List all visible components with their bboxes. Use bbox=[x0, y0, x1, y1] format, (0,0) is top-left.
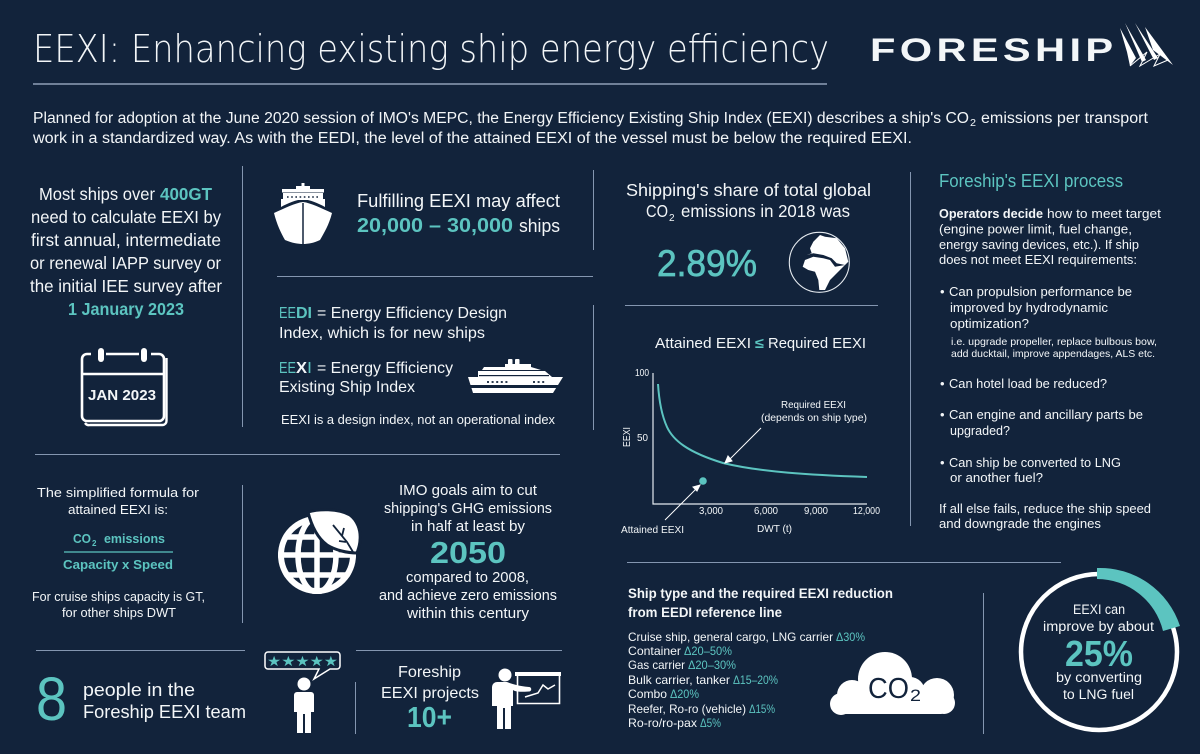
panel: ship type reduction list: Container bbox=[628, 644, 681, 658]
text: shipping's share of emissions: emissions in 2018 was bbox=[681, 201, 850, 221]
text: EEDI and EEXI definitions: EE bbox=[279, 305, 296, 322]
panel: Foreship's EEXI process: i.e. upgrade propeller, replace bulbous bow, bbox=[951, 336, 1157, 348]
text: ships affected: 20,000 – 30,000 bbox=[357, 214, 513, 237]
text: Foreship EEXI projects: 10+ bbox=[407, 702, 452, 734]
panel: who must calculate EEXI: Most ships over bbox=[39, 184, 155, 204]
panel: ship type reduction list: Δ20–30% bbox=[688, 658, 736, 672]
chart: attained vs required EEXI: 3,000 bbox=[699, 505, 723, 517]
panel: Foreship's EEXI process: how to meet target bbox=[1047, 206, 1161, 221]
panel: simplified formula: attained EEXI is: bbox=[68, 502, 168, 517]
text: ships affected bbox=[357, 191, 560, 237]
text: Foreship EEXI projects bbox=[381, 664, 479, 734]
panel: ship type reduction list: Ship type and the required EEXI reduction bbox=[628, 586, 893, 601]
text: ships affected: ships bbox=[519, 216, 560, 236]
icon: calendar: JAN 2023 bbox=[88, 388, 156, 404]
panel: Foreship's EEXI process: Can ship be converted to LNG bbox=[949, 455, 1121, 470]
callout: 25% improvement ring: 25% bbox=[1065, 633, 1133, 674]
panel: simplified formula: Capacity x Speed bbox=[63, 557, 173, 572]
chart: attained vs required EEXI: Required EEXI bbox=[768, 336, 866, 352]
panel: Foreship's EEXI process: Can engine and ancillary parts be bbox=[949, 407, 1143, 422]
panel: Foreship's EEXI process: (engine power limit, fuel change, bbox=[939, 222, 1132, 236]
callout: 25% improvement ring bbox=[1021, 568, 1180, 730]
text: EEDI and EEXI definitions: I bbox=[307, 360, 312, 377]
panel: ship type reduction list: Cruise ship, general cargo, LNG carrier bbox=[628, 630, 833, 644]
icon: presenter with chart bbox=[492, 668, 561, 729]
panel: ship type reduction list: Combo bbox=[628, 687, 667, 701]
panel: who must calculate EEXI: the initial IEE survey after bbox=[30, 276, 222, 296]
chart: attained vs required EEXI: 100 bbox=[635, 367, 649, 379]
panel: Foreship's EEXI process: Operators decide bbox=[939, 206, 1043, 221]
callout: 25% improvement ring: by converting bbox=[1056, 670, 1142, 685]
text: EEDI and EEXI definitions: EEXI is a design index, not an operational index bbox=[281, 412, 555, 427]
text: IMO goals: in half at least by bbox=[411, 518, 525, 535]
icon: CO2 cloud: CO bbox=[868, 673, 909, 705]
text: IMO goals: within this century bbox=[406, 605, 530, 622]
panel: ship type reduction list bbox=[628, 586, 893, 730]
panel: Foreship's EEXI process bbox=[939, 171, 1161, 531]
panel: who must calculate EEXI: 1 January 2023 bbox=[68, 299, 184, 319]
text: IMO goals: 2050 bbox=[430, 535, 506, 570]
text: ships affected: Fulfilling EEXI may affect bbox=[357, 191, 560, 211]
text: EEDI and EEXI definitions: X bbox=[296, 360, 307, 377]
big number: team size: Foreship EEXI team bbox=[83, 702, 246, 722]
chart: attained vs required EEXI: 50 bbox=[637, 432, 648, 444]
panel: ship type reduction list: Δ20–50% bbox=[684, 644, 732, 658]
chart: attained vs required EEXI: 12,000 bbox=[853, 505, 880, 517]
panel: Foreship's EEXI process: Can propulsion performance be bbox=[949, 284, 1132, 299]
callout: 25% improvement ring: to LNG fuel bbox=[1063, 687, 1134, 702]
text: EEDI and EEXI definitions: DI bbox=[296, 305, 312, 322]
icon: earth globe bbox=[789, 232, 849, 292]
panel: ship type reduction list: Δ15–20% bbox=[733, 673, 778, 687]
chart: attained vs required EEXI: Attained EEXI bbox=[655, 336, 751, 352]
chart: attained vs required EEXI: Attained EEXI bbox=[621, 524, 684, 536]
text: EEDI and EEXI definitions: = Energy Efficiency Design bbox=[317, 305, 507, 322]
text: IMO goals: and achieve zero emissions bbox=[379, 587, 557, 604]
heading: process: Foreship's EEXI process bbox=[939, 171, 1123, 191]
panel: ship type reduction list: Δ20% bbox=[670, 687, 699, 701]
panel: simplified formula: For cruise ships capacity is GT, bbox=[32, 590, 205, 604]
panel: who must calculate EEXI: or renewal IAPP survey or bbox=[30, 253, 221, 273]
panel: Foreship's EEXI process: does not meet EEXI requirements: bbox=[939, 252, 1137, 267]
logo: Foreship: FORESHIP bbox=[870, 32, 1113, 68]
intro paragraph: Planned for adoption at the June 2020 session of IMO's MEPC, the Energy Efficiency Existing Ship Index (EEXI) describes a ship's CO bbox=[33, 110, 969, 127]
panel: ship type reduction list: Reefer, Ro-ro (vehicle) bbox=[628, 702, 746, 716]
panel: Foreship's EEXI process: add ducktail, improve appendages, ALS etc. bbox=[951, 348, 1155, 360]
text: shipping's share of emissions: 2.89% bbox=[657, 243, 757, 284]
icon: person with star rating: ★★★★★ bbox=[267, 654, 338, 670]
panel: Foreship's EEXI process: energy saving devices, etc.). If ship bbox=[939, 237, 1139, 252]
intro paragraph: emissions per transport bbox=[981, 110, 1149, 127]
icon: cruise ship bbox=[468, 359, 563, 393]
panel: who must calculate EEXI: need to calculate EEXI by bbox=[31, 207, 221, 227]
logo: Foreship bbox=[870, 23, 1173, 68]
chart: attained vs required EEXI: ≤ bbox=[755, 336, 764, 352]
icon: person with star rating bbox=[265, 652, 340, 733]
text: IMO goals bbox=[379, 482, 557, 622]
text: IMO goals: IMO goals aim to cut bbox=[399, 482, 538, 499]
panel: who must calculate EEXI: 400GT bbox=[160, 184, 212, 204]
icon: globe with leaf bbox=[278, 510, 360, 594]
chart: attained vs required EEXI: 9,000 bbox=[804, 505, 828, 517]
panel: ship type reduction list: from EEDI reference line bbox=[628, 605, 782, 620]
text: IMO goals: compared to 2008, bbox=[406, 569, 529, 586]
text: Foreship EEXI projects: EEXI projects bbox=[381, 685, 479, 702]
panel: Foreship's EEXI process: upgraded? bbox=[950, 423, 1010, 438]
chart: attained vs required EEXI: (depends on ship type) bbox=[761, 412, 867, 424]
intro paragraph: work in a standardized way. As with the EEDI, the level of the attained EEXI of the vessel must be below the required EEXI. bbox=[32, 130, 912, 147]
callout: 25% improvement ring: improve by about bbox=[1043, 619, 1154, 634]
text: EEDI and EEXI definitions: EE bbox=[279, 360, 296, 377]
panel: Foreship's EEXI process: • bbox=[940, 376, 945, 391]
big number: team size: 8 bbox=[36, 665, 67, 733]
panel: Foreship's EEXI process: optimization? bbox=[950, 316, 1029, 331]
chart: attained vs required EEXI: EEXI bbox=[621, 427, 633, 447]
panel: who must calculate EEXI bbox=[30, 184, 222, 319]
text: shipping's share of emissions: 2 bbox=[669, 213, 675, 224]
big number: team size: people in the bbox=[83, 680, 195, 700]
text: shipping's share of emissions: Shipping's share of total global bbox=[626, 180, 871, 200]
text: shipping's share of emissions: CO bbox=[646, 201, 668, 221]
big number: team size bbox=[36, 665, 246, 733]
panel: ship type reduction list: Δ5% bbox=[700, 716, 721, 730]
callout: 25% improvement ring: EEXI can bbox=[1073, 602, 1125, 617]
panel: ship type reduction list: Gas carrier bbox=[628, 658, 685, 672]
title: EEXI: Enhancing existing ship energy efficiency bbox=[33, 27, 829, 71]
chart: attained vs required EEXI: 6,000 bbox=[754, 505, 778, 517]
panel: Foreship's EEXI process: Can hotel load be reduced? bbox=[949, 376, 1107, 391]
panel: simplified formula: emissions bbox=[104, 531, 165, 546]
text: EEDI and EEXI definitions bbox=[279, 305, 555, 427]
panel: simplified formula: for other ships DWT bbox=[62, 606, 176, 620]
panel: who must calculate EEXI: first annual, intermediate bbox=[31, 230, 221, 250]
panel: Foreship's EEXI process: If all else fails, reduce the ship speed bbox=[939, 501, 1151, 516]
panel: simplified formula: 2 bbox=[92, 539, 97, 548]
icon: CO2 cloud bbox=[830, 652, 955, 715]
text: IMO goals: shipping's GHG emissions bbox=[384, 500, 552, 517]
chart: attained vs required EEXI: DWT (t) bbox=[757, 523, 792, 535]
panel: Foreship's EEXI process: and downgrade the engines bbox=[939, 516, 1101, 531]
intro paragraph bbox=[32, 110, 1149, 147]
icon: CO2 cloud: 2 bbox=[910, 686, 921, 705]
chart: attained vs required EEXI bbox=[621, 336, 880, 536]
panel: ship type reduction list: Δ15% bbox=[749, 702, 775, 716]
panel: ship type reduction list: Bulk carrier, tanker bbox=[628, 673, 730, 687]
text: EEDI and EEXI definitions: Index, which is for new ships bbox=[279, 325, 485, 342]
text: EEDI and EEXI definitions: = Energy Efficiency bbox=[317, 360, 453, 377]
panel: Foreship's EEXI process: • bbox=[940, 455, 945, 470]
text: EEDI and EEXI definitions: Existing Ship Index bbox=[279, 379, 415, 396]
panel: simplified formula: CO bbox=[73, 531, 91, 546]
text: Foreship EEXI projects: Foreship bbox=[398, 664, 461, 681]
panel: ship type reduction list: Ro-ro/ro-pax bbox=[628, 716, 697, 730]
panel: simplified formula bbox=[32, 485, 205, 620]
chart: attained vs required EEXI: Required EEXI bbox=[781, 399, 846, 411]
intro paragraph: 2 bbox=[970, 118, 976, 129]
text: shipping's share of emissions bbox=[626, 180, 871, 284]
panel: ship type reduction list: Δ30% bbox=[836, 630, 865, 644]
panel: Foreship's EEXI process: • bbox=[940, 284, 945, 299]
icon: calendar bbox=[82, 348, 166, 425]
panel: Foreship's EEXI process: improved by hydrodynamic bbox=[950, 300, 1108, 315]
panel: Foreship's EEXI process: or another fuel? bbox=[950, 470, 1043, 485]
panel: simplified formula: The simplified formula for bbox=[37, 485, 200, 500]
panel: Foreship's EEXI process: • bbox=[940, 407, 945, 422]
icon: ship front view bbox=[274, 183, 332, 244]
